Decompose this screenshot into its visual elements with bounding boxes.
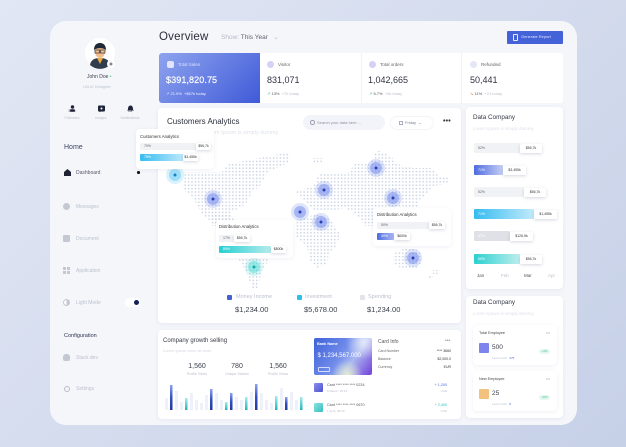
menu: ••• — [546, 377, 550, 381]
subheading: Lorem Ipsum is simply dummy — [473, 126, 534, 131]
panel: company growth — [158, 330, 461, 419]
label: bar value: $56,7k — [198, 144, 209, 148]
swatch — [297, 295, 302, 300]
map pin: blue — [315, 181, 333, 199]
bank name: Bank Name — [317, 342, 338, 346]
bar: 50% — [377, 222, 432, 229]
badge — [539, 349, 550, 354]
value: $2,000.0 — [437, 357, 451, 361]
label: Spending — [368, 294, 391, 300]
label: bar value — [394, 233, 410, 240]
heading: home: Home — [64, 144, 83, 151]
label: bar value — [271, 246, 286, 253]
tooltip: distribution analytics right — [373, 208, 451, 246]
stat: followers: 3.7k — [68, 109, 76, 113]
value: $1,455k — [539, 212, 552, 216]
button: generate report: Generate Report — [521, 34, 551, 39]
icon: person — [479, 343, 489, 353]
metric: unique visitors: Unique Visitors — [225, 372, 249, 376]
icon — [314, 383, 323, 392]
label: Money Income — [236, 294, 272, 300]
tooltip title: Distribution Analytics — [219, 224, 259, 229]
stat: followers: Followers — [64, 116, 79, 120]
value — [524, 188, 546, 197]
metric: unique visitors: 780 — [231, 363, 243, 370]
label: bar value: $3,455k — [184, 155, 197, 159]
axis: mar: Mar — [524, 273, 532, 278]
label: bar value — [234, 235, 250, 242]
chart: world dot map — [182, 150, 448, 288]
label: Refunded — [481, 62, 501, 67]
currency: USD — [441, 389, 447, 393]
label: bar value — [183, 154, 198, 161]
card chip — [318, 367, 330, 372]
axis: feb: Feb — [501, 273, 509, 278]
menu: ••• — [546, 331, 550, 335]
metric: profile views: 1,560 — [188, 363, 206, 370]
last month: Last month : 8 — [492, 402, 511, 406]
badge: +4% — [542, 349, 547, 353]
stat card: total sales — [159, 53, 260, 103]
dashboard panel — [50, 21, 577, 425]
value: 831,071 — [267, 75, 300, 85]
value: $56,7k — [526, 257, 536, 261]
axis: jan: Jan — [477, 273, 484, 278]
date: 1 April, 08:30 — [327, 409, 345, 413]
row: card number: Card Number — [378, 349, 399, 353]
label: Total Employee — [479, 331, 505, 335]
bar: 75% — [140, 154, 184, 161]
bar: 17% — [219, 235, 234, 242]
period selector: Show: This Year ⌄ — [221, 34, 279, 41]
bar: 71% — [474, 209, 534, 219]
nav: document — [63, 235, 99, 242]
map pin: blue — [204, 190, 222, 208]
bar: 85%: 85% — [223, 247, 230, 251]
change: ↗ 13% +7k today — [267, 91, 299, 96]
bar: 52%: 52% — [478, 190, 485, 194]
bar chart — [165, 384, 302, 410]
row: currency: Currency — [378, 365, 392, 369]
value: 500 — [492, 344, 503, 351]
value: 1,042,665 — [368, 75, 408, 85]
map pin: blue — [404, 249, 422, 267]
nav: messages — [63, 203, 99, 210]
bar: 71%: 71% — [478, 168, 485, 172]
stat: images: 64 — [99, 109, 103, 113]
bar: 70% — [140, 143, 199, 150]
card info — [378, 338, 451, 369]
icon: sales — [167, 61, 174, 68]
nav: light mode toggle — [63, 298, 140, 307]
map pin: blue — [384, 189, 402, 207]
stat card: visitor — [260, 53, 361, 103]
icon: person — [479, 389, 489, 399]
nav: settings — [64, 386, 94, 392]
bar: 37% — [474, 231, 510, 241]
bar: 71%: 71% — [478, 212, 485, 216]
icon — [314, 403, 323, 412]
heading: Card Info — [378, 338, 399, 344]
bar: 85% — [219, 246, 271, 253]
stat: notifications: 13 — [128, 109, 132, 113]
stat: notifications — [120, 106, 140, 120]
value — [503, 166, 526, 175]
nav: application — [63, 267, 100, 274]
subheading: Lorem Ipsum is simply dummy — [204, 130, 278, 136]
nav: document: Document — [76, 236, 99, 242]
stat: images — [95, 106, 107, 120]
label: bar value: $56,7k — [237, 236, 247, 240]
legend: investment — [297, 294, 338, 314]
bar: 70%: 70% — [144, 144, 151, 148]
panel: data company chart — [466, 107, 563, 289]
nav: stack dev — [63, 354, 98, 361]
nav: settings: Settings — [76, 386, 94, 392]
card: new employee — [473, 371, 557, 411]
bar: 52% — [474, 143, 521, 153]
bank card — [314, 338, 372, 375]
menu: ••• — [445, 338, 450, 344]
value: $391,820.75 — [166, 75, 217, 85]
stat card: refunded — [461, 53, 563, 103]
label: Total Sales — [178, 62, 200, 67]
nav: dashboard — [64, 169, 140, 176]
stat: followers — [64, 105, 80, 120]
currency: USD — [441, 409, 447, 413]
user name: John Doe • — [87, 74, 112, 80]
label: Total orders — [380, 62, 404, 67]
value — [520, 144, 542, 153]
title: Overview — [159, 30, 209, 42]
transaction: card 1 — [314, 383, 447, 393]
heading: data company: Data Company — [473, 299, 515, 306]
stat card: total orders — [361, 53, 461, 103]
metric: profile views — [268, 363, 288, 376]
button: generate report — [507, 31, 563, 44]
axis: apr: Apr — [548, 273, 555, 278]
tooltip title: Customers Analytics — [140, 134, 179, 138]
tooltip title: Distribution Analytics — [377, 212, 417, 217]
heading: data company: Data Company — [473, 114, 515, 121]
map pin: blue — [291, 203, 309, 221]
nav: dashboard: Dashboard — [76, 170, 100, 176]
transaction: card 2 — [314, 403, 447, 413]
panel: data company employees — [466, 296, 563, 418]
heading: configuration: Configuration — [64, 333, 97, 339]
swatch — [360, 295, 365, 300]
bar: 50%: 50% — [381, 223, 388, 227]
user role: UI/UX Designer — [83, 84, 111, 89]
value: **** 3660 — [437, 349, 451, 353]
value: $3,455k — [508, 168, 521, 172]
badge: +6% — [542, 395, 547, 399]
bar: 75%: 75% — [144, 155, 151, 159]
map pin: cyan — [166, 169, 184, 184]
swatch — [227, 295, 232, 300]
nav: messages: Messages — [76, 204, 99, 210]
avatar — [85, 38, 115, 69]
icon: document — [513, 34, 518, 40]
date selector: Friday ⌄ — [405, 120, 422, 125]
balance: $ 1,234,567.000 — [318, 353, 361, 359]
icon: search — [310, 120, 314, 124]
legend: spending — [360, 294, 400, 314]
value: $1,234.00 — [235, 305, 268, 314]
bar: 37%: 37% — [478, 234, 485, 238]
row: balance: Balance — [378, 357, 391, 361]
label: Investment — [305, 294, 332, 300]
metric: profile views: 1,560 — [269, 363, 287, 370]
value: $56,7k — [526, 146, 536, 150]
legend: money income — [227, 294, 272, 314]
icon: visitor — [267, 61, 274, 68]
bar: 17%: 17% — [223, 236, 230, 240]
more menu: ••• — [443, 118, 451, 125]
value — [510, 232, 533, 241]
label: bar value: $56,7k — [432, 223, 442, 227]
search box: Search your data here ... — [317, 120, 361, 125]
icon: calendar — [399, 120, 403, 125]
tooltip: distribution analytics left — [216, 220, 293, 258]
badge — [539, 395, 550, 400]
bar: 60% — [474, 254, 520, 264]
value: 25 — [492, 390, 499, 397]
bar: 52%: 52% — [478, 146, 485, 150]
stat: notifications: Notifications — [120, 116, 140, 120]
change: ↘ 11% +21 today — [470, 91, 502, 96]
metric: profile views: Profile Views — [187, 372, 207, 376]
icon: refunded — [470, 61, 477, 68]
map pin: blue — [312, 213, 330, 231]
nav: stack dev: Stack dev — [76, 354, 98, 360]
change: ↗ 21.9% +$67k today — [166, 91, 206, 96]
panel: customers analytics — [158, 108, 461, 323]
label: Card **** **** **** 0234 — [327, 383, 365, 387]
heading: company growth selling: Company growth selling — [163, 338, 227, 344]
bar: 60%: 60% — [478, 257, 485, 261]
value: $56,7k — [530, 190, 540, 194]
metric: unique visitors — [225, 363, 249, 376]
horizontal bar chart — [474, 143, 558, 278]
metric: profile views: Profile Views — [268, 372, 288, 376]
value: 50,441 — [470, 75, 498, 85]
label: bar value — [429, 222, 445, 229]
date: 5 March, 18:33 — [327, 389, 347, 393]
subheading: Lorem ipsum dolor sit amet — [163, 348, 211, 353]
date selector — [390, 116, 434, 130]
amount: + 1,200 — [435, 383, 447, 387]
amount: + 2,400 — [435, 403, 447, 407]
map pin: blue — [367, 159, 385, 177]
metric: profile views — [187, 363, 207, 376]
nav: application: Application — [76, 268, 100, 274]
bar: 52% — [474, 187, 524, 197]
last month: Last month : 475 — [492, 356, 514, 360]
label: bar value: $600k — [397, 234, 407, 238]
bar: 71% — [474, 165, 503, 175]
label: New Employee — [479, 377, 505, 381]
tooltip: customers analytics — [136, 129, 214, 169]
nav: light mode toggle: Light Mode — [76, 300, 101, 306]
icon: orders — [369, 61, 376, 68]
bar: 40%: 40% — [381, 234, 388, 238]
label: Visitor — [278, 62, 290, 67]
value: $5,678.00 — [304, 305, 337, 314]
map pin: teal — [245, 258, 263, 276]
subheading: Lorem Ipsum is simply dummy — [473, 311, 534, 316]
label: Card **** **** **** 0670 — [327, 403, 365, 407]
value: $126,5k — [515, 234, 528, 238]
label: bar value: $800k — [274, 247, 283, 251]
stat: images: Images — [95, 116, 107, 120]
search box — [303, 115, 385, 130]
label: bar value — [196, 143, 211, 150]
bar: 40% — [377, 233, 394, 240]
value: EUR — [444, 365, 451, 369]
value — [534, 210, 557, 219]
value — [520, 255, 542, 264]
card: total employee — [473, 325, 557, 365]
value: $1,234.00 — [367, 305, 400, 314]
heading: customers analytics: Customers Analytics — [167, 117, 239, 126]
change: ↗ 5.7% +5k today — [369, 91, 402, 96]
